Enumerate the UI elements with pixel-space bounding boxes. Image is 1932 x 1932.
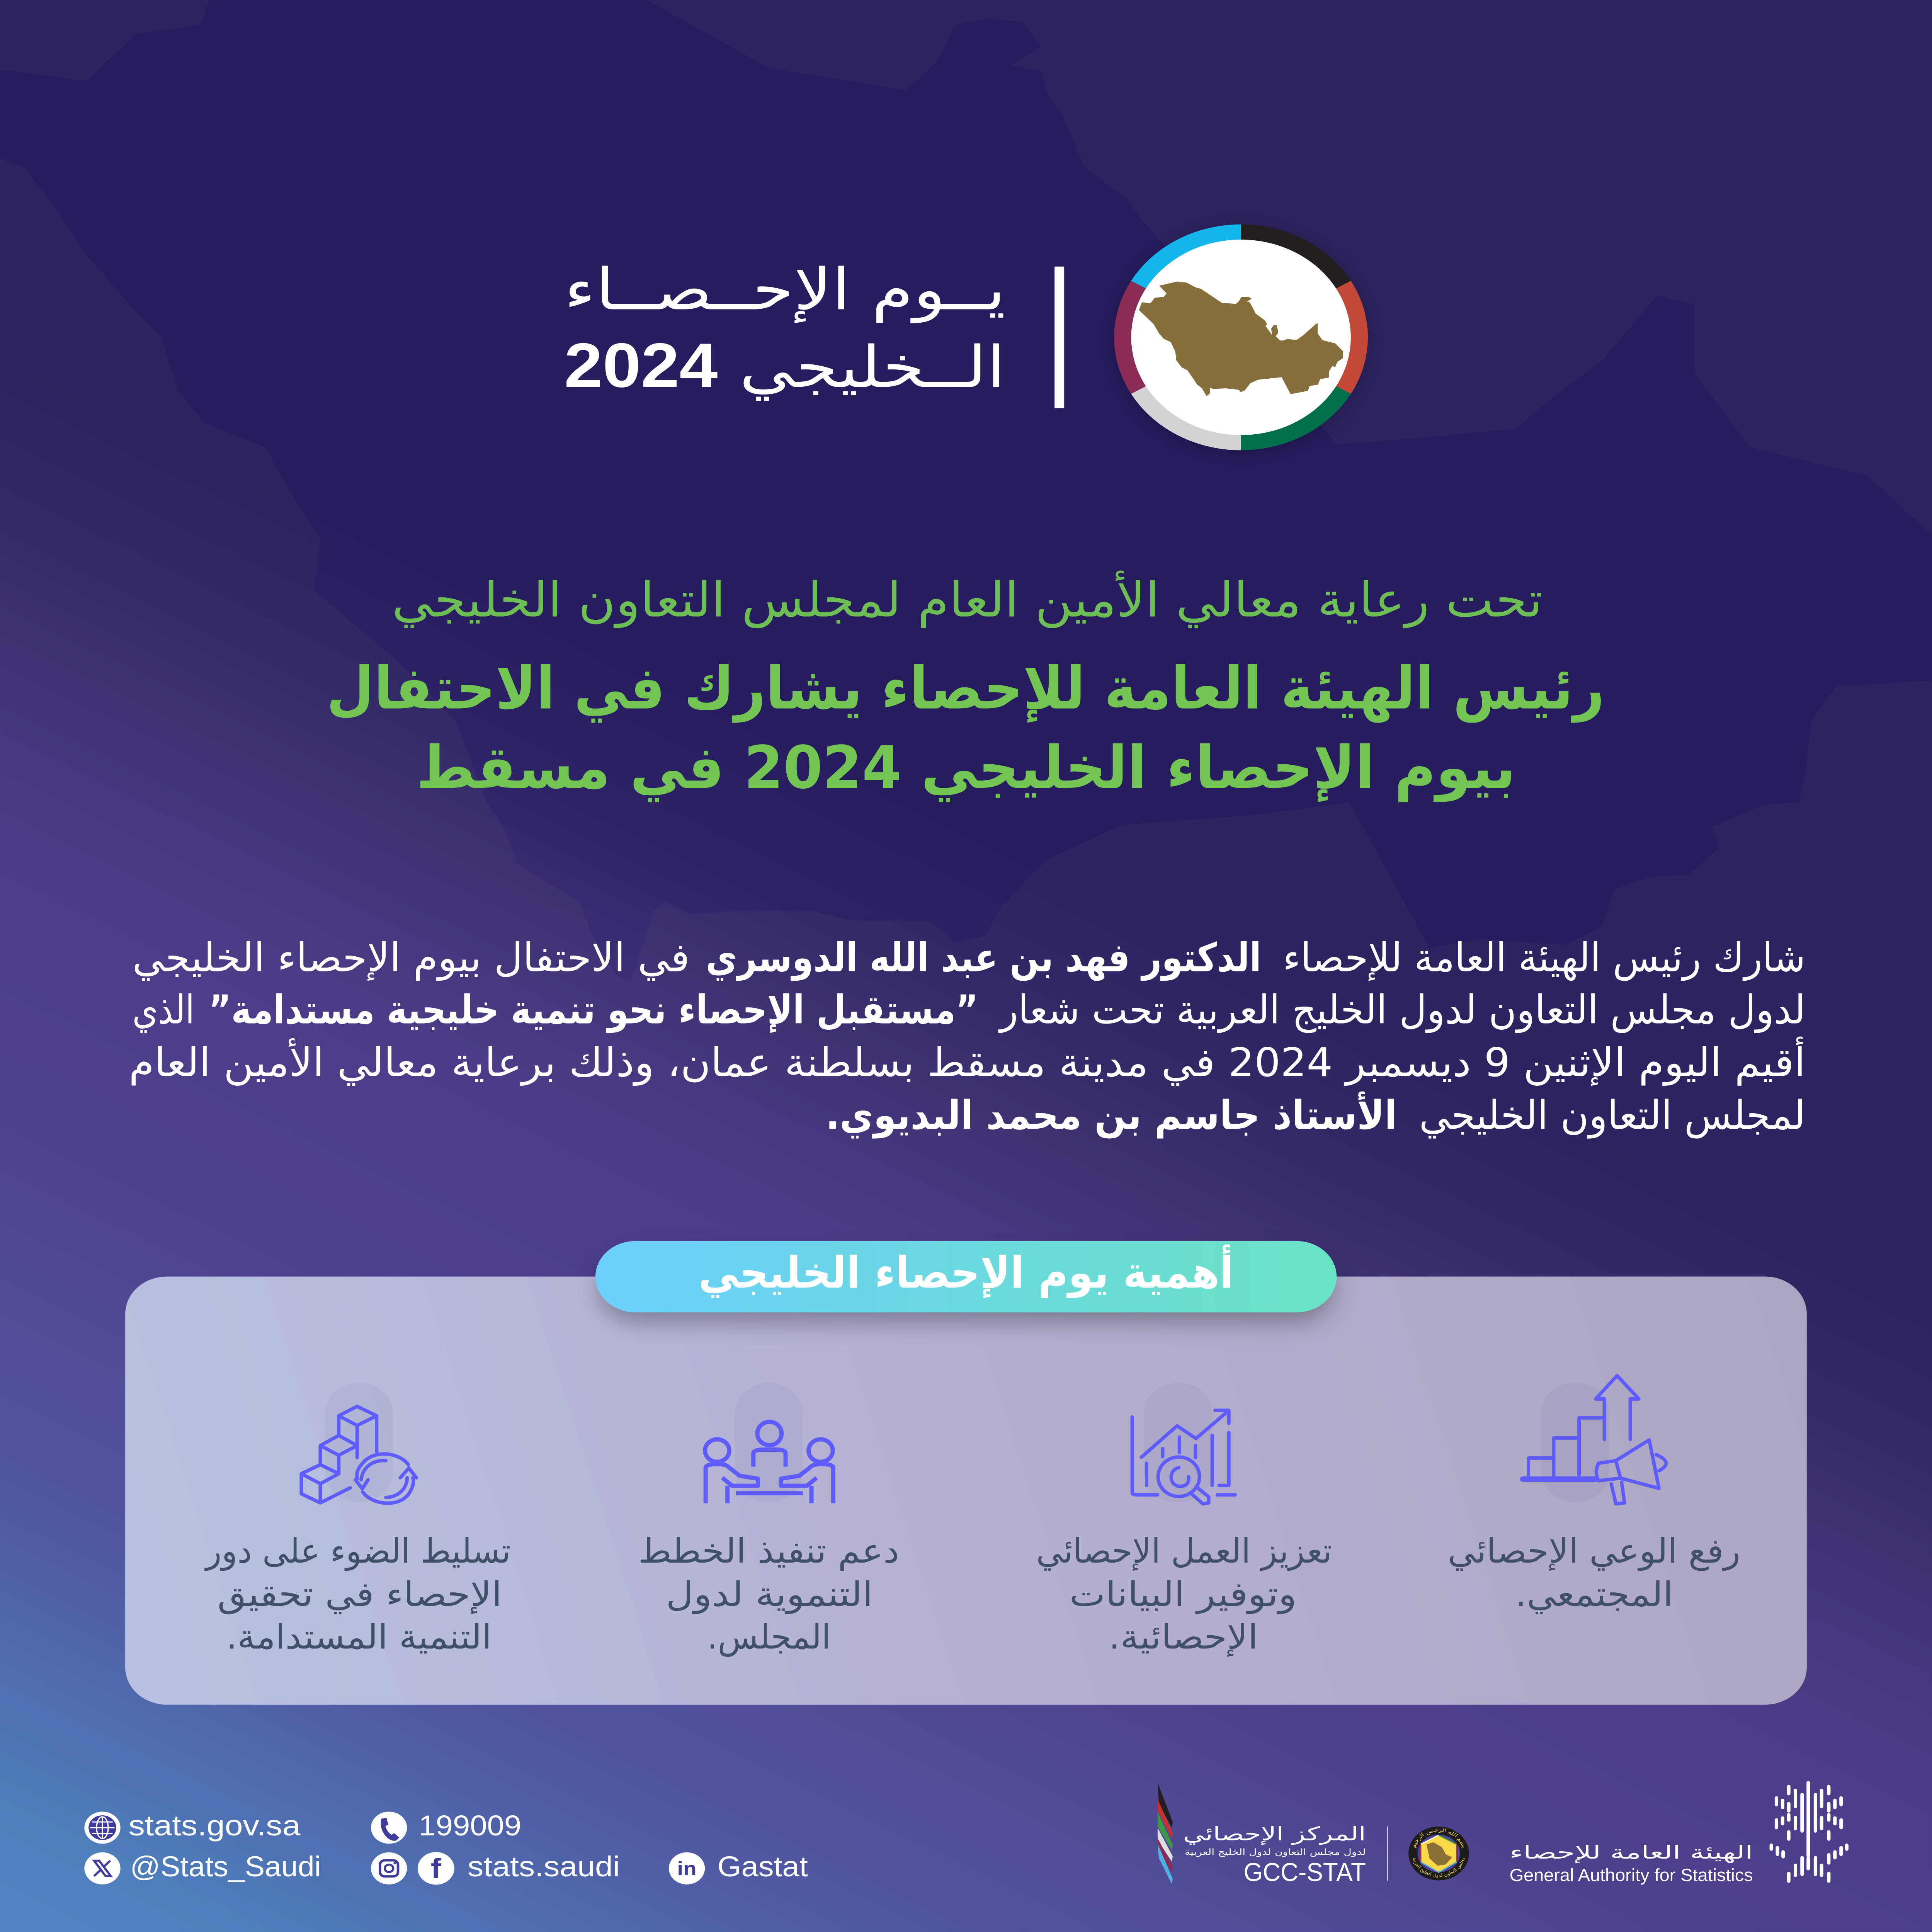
capsule backdrops xyxy=(325,1383,1609,1502)
subtitle: تحت رعاية معالي الأمين العام لمجلس التعاون الخليجي xyxy=(392,570,1543,628)
GCC-STAT wordmark: لدول مجلس التعاون لدول الخليج العربية xyxy=(1185,1847,1366,1857)
intro paragraph: الدكتور فهد بن عبد الله الدوسري xyxy=(706,935,1261,981)
icon: chart with magnifier xyxy=(1132,1410,1235,1504)
main heading xyxy=(327,654,1604,803)
GASTAT logo mark xyxy=(1771,1783,1847,1881)
caption: sustainable development: التنمية المستدامة. xyxy=(226,1617,492,1656)
intro paragraph: شارك رئيس الهيئة العامة للإحصاء xyxy=(1283,935,1805,981)
GCC emblem: بسم الله الرحمن الرحيم xyxy=(1409,1826,1468,1849)
intro paragraph: الذي xyxy=(132,987,194,1033)
GASTAT wordmark: الهيئة العامة للإحصاء xyxy=(1510,1842,1753,1863)
title: يــوم الإحــصــاء xyxy=(564,257,1006,323)
footer: Instagram and Facebook contact: stats.saudi xyxy=(468,1850,620,1883)
GCC-STAT wordmark xyxy=(1183,1823,1366,1887)
panel heading pill: أهمية يوم الإحصاء الخليجي xyxy=(698,1245,1233,1299)
GCC-STAT wordmark: المركز الإحصائي xyxy=(1183,1823,1366,1845)
GCC-STAT ribbon logo xyxy=(1158,1783,1173,1884)
caption: sustainable development xyxy=(204,1531,511,1656)
caption: raising awareness: المجتمعي. xyxy=(1515,1575,1673,1614)
caption: development plans: المجلس. xyxy=(707,1617,831,1657)
GASTAT wordmark: General Authority for Statistics xyxy=(1510,1866,1753,1885)
footer: Instagram and Facebook contact: f xyxy=(431,1853,441,1884)
footer: LinkedIn contact: Gastat xyxy=(718,1850,808,1883)
footer: LinkedIn contact xyxy=(669,1850,808,1884)
main heading: رئيس الهيئة العامة للإحصاء يشارك في الاحتفال xyxy=(327,654,1604,723)
GCC emblem xyxy=(1408,1826,1469,1880)
footer: X contact: @Stats_Saudi xyxy=(130,1850,321,1883)
caption: raising awareness: رفع الوعي الإحصائي xyxy=(1448,1531,1740,1571)
title: 2024 xyxy=(564,330,718,400)
caption: development plans: التنموية لدول xyxy=(666,1575,873,1614)
intro paragraph: الأستاذ جاسم بن محمد البديوي. xyxy=(826,1092,1397,1139)
footer: LinkedIn contact: in xyxy=(677,1858,697,1879)
logo divider xyxy=(1054,267,1064,408)
caption: statistical work: الإحصائية. xyxy=(1109,1617,1258,1657)
footer: website contact: stats.gov.sa xyxy=(128,1810,301,1842)
pill shadow xyxy=(599,1255,1333,1323)
intro paragraph: لمجلس التعاون الخليجي xyxy=(1419,1092,1805,1139)
caption: sustainable development: تسليط الضوء على دور xyxy=(204,1531,511,1571)
footer logo divider xyxy=(1387,1827,1388,1881)
footer: phone contact: 199009 xyxy=(418,1810,521,1842)
icon: rising bars with megaphone xyxy=(1523,1376,1666,1504)
caption: statistical work: وتوفير البيانات xyxy=(1070,1575,1297,1614)
GASTAT wordmark xyxy=(1510,1842,1753,1885)
GCC emblem: مجلس التعاون لدول الخليج العربية xyxy=(1412,1857,1466,1878)
intro paragraph: لدول مجلس التعاون لدول الخليج العربية تحت شعار xyxy=(998,987,1805,1033)
icon: people meeting xyxy=(705,1422,833,1503)
intro paragraph: أقيم اليوم الإثنين 9 ديسمبر 2024 في مدينة مسقط بسلطنة عمان، وذلك برعاية معالي الأمين العام xyxy=(129,1037,1805,1086)
title: الــخليجي xyxy=(739,334,1006,401)
title xyxy=(564,257,1005,401)
footer: Instagram and Facebook contact xyxy=(371,1850,620,1885)
caption: development plans: دعم تنفيذ الخطط xyxy=(638,1531,900,1571)
GCC-STAT wordmark: GCC-STAT xyxy=(1243,1858,1366,1887)
caption: development plans xyxy=(638,1531,900,1657)
intro paragraph xyxy=(129,935,1806,1139)
caption: raising awareness xyxy=(1448,1531,1740,1614)
caption: statistical work xyxy=(1036,1531,1332,1657)
icon: cubes and cycle arrows xyxy=(301,1406,417,1503)
intro paragraph: ”مستقبل الإحصاء نحو تنمية خليجية مستدامة” xyxy=(209,987,978,1033)
panel heading pill xyxy=(595,1241,1337,1312)
intro paragraph: في الاحتفال بيوم الإحصاء الخليجي xyxy=(132,935,690,981)
caption: statistical work: تعزيز العمل الإحصائي xyxy=(1036,1531,1332,1571)
footer: phone contact xyxy=(371,1810,521,1844)
panel: importance of Gulf Statistics Day xyxy=(125,1241,1807,1705)
main heading: بيوم الإحصاء الخليجي 2024 في مسقط xyxy=(416,734,1515,803)
header logo: GCC statistics day emblem xyxy=(1113,226,1369,454)
caption: sustainable development: الإحصاء في تحقيق xyxy=(217,1575,502,1614)
